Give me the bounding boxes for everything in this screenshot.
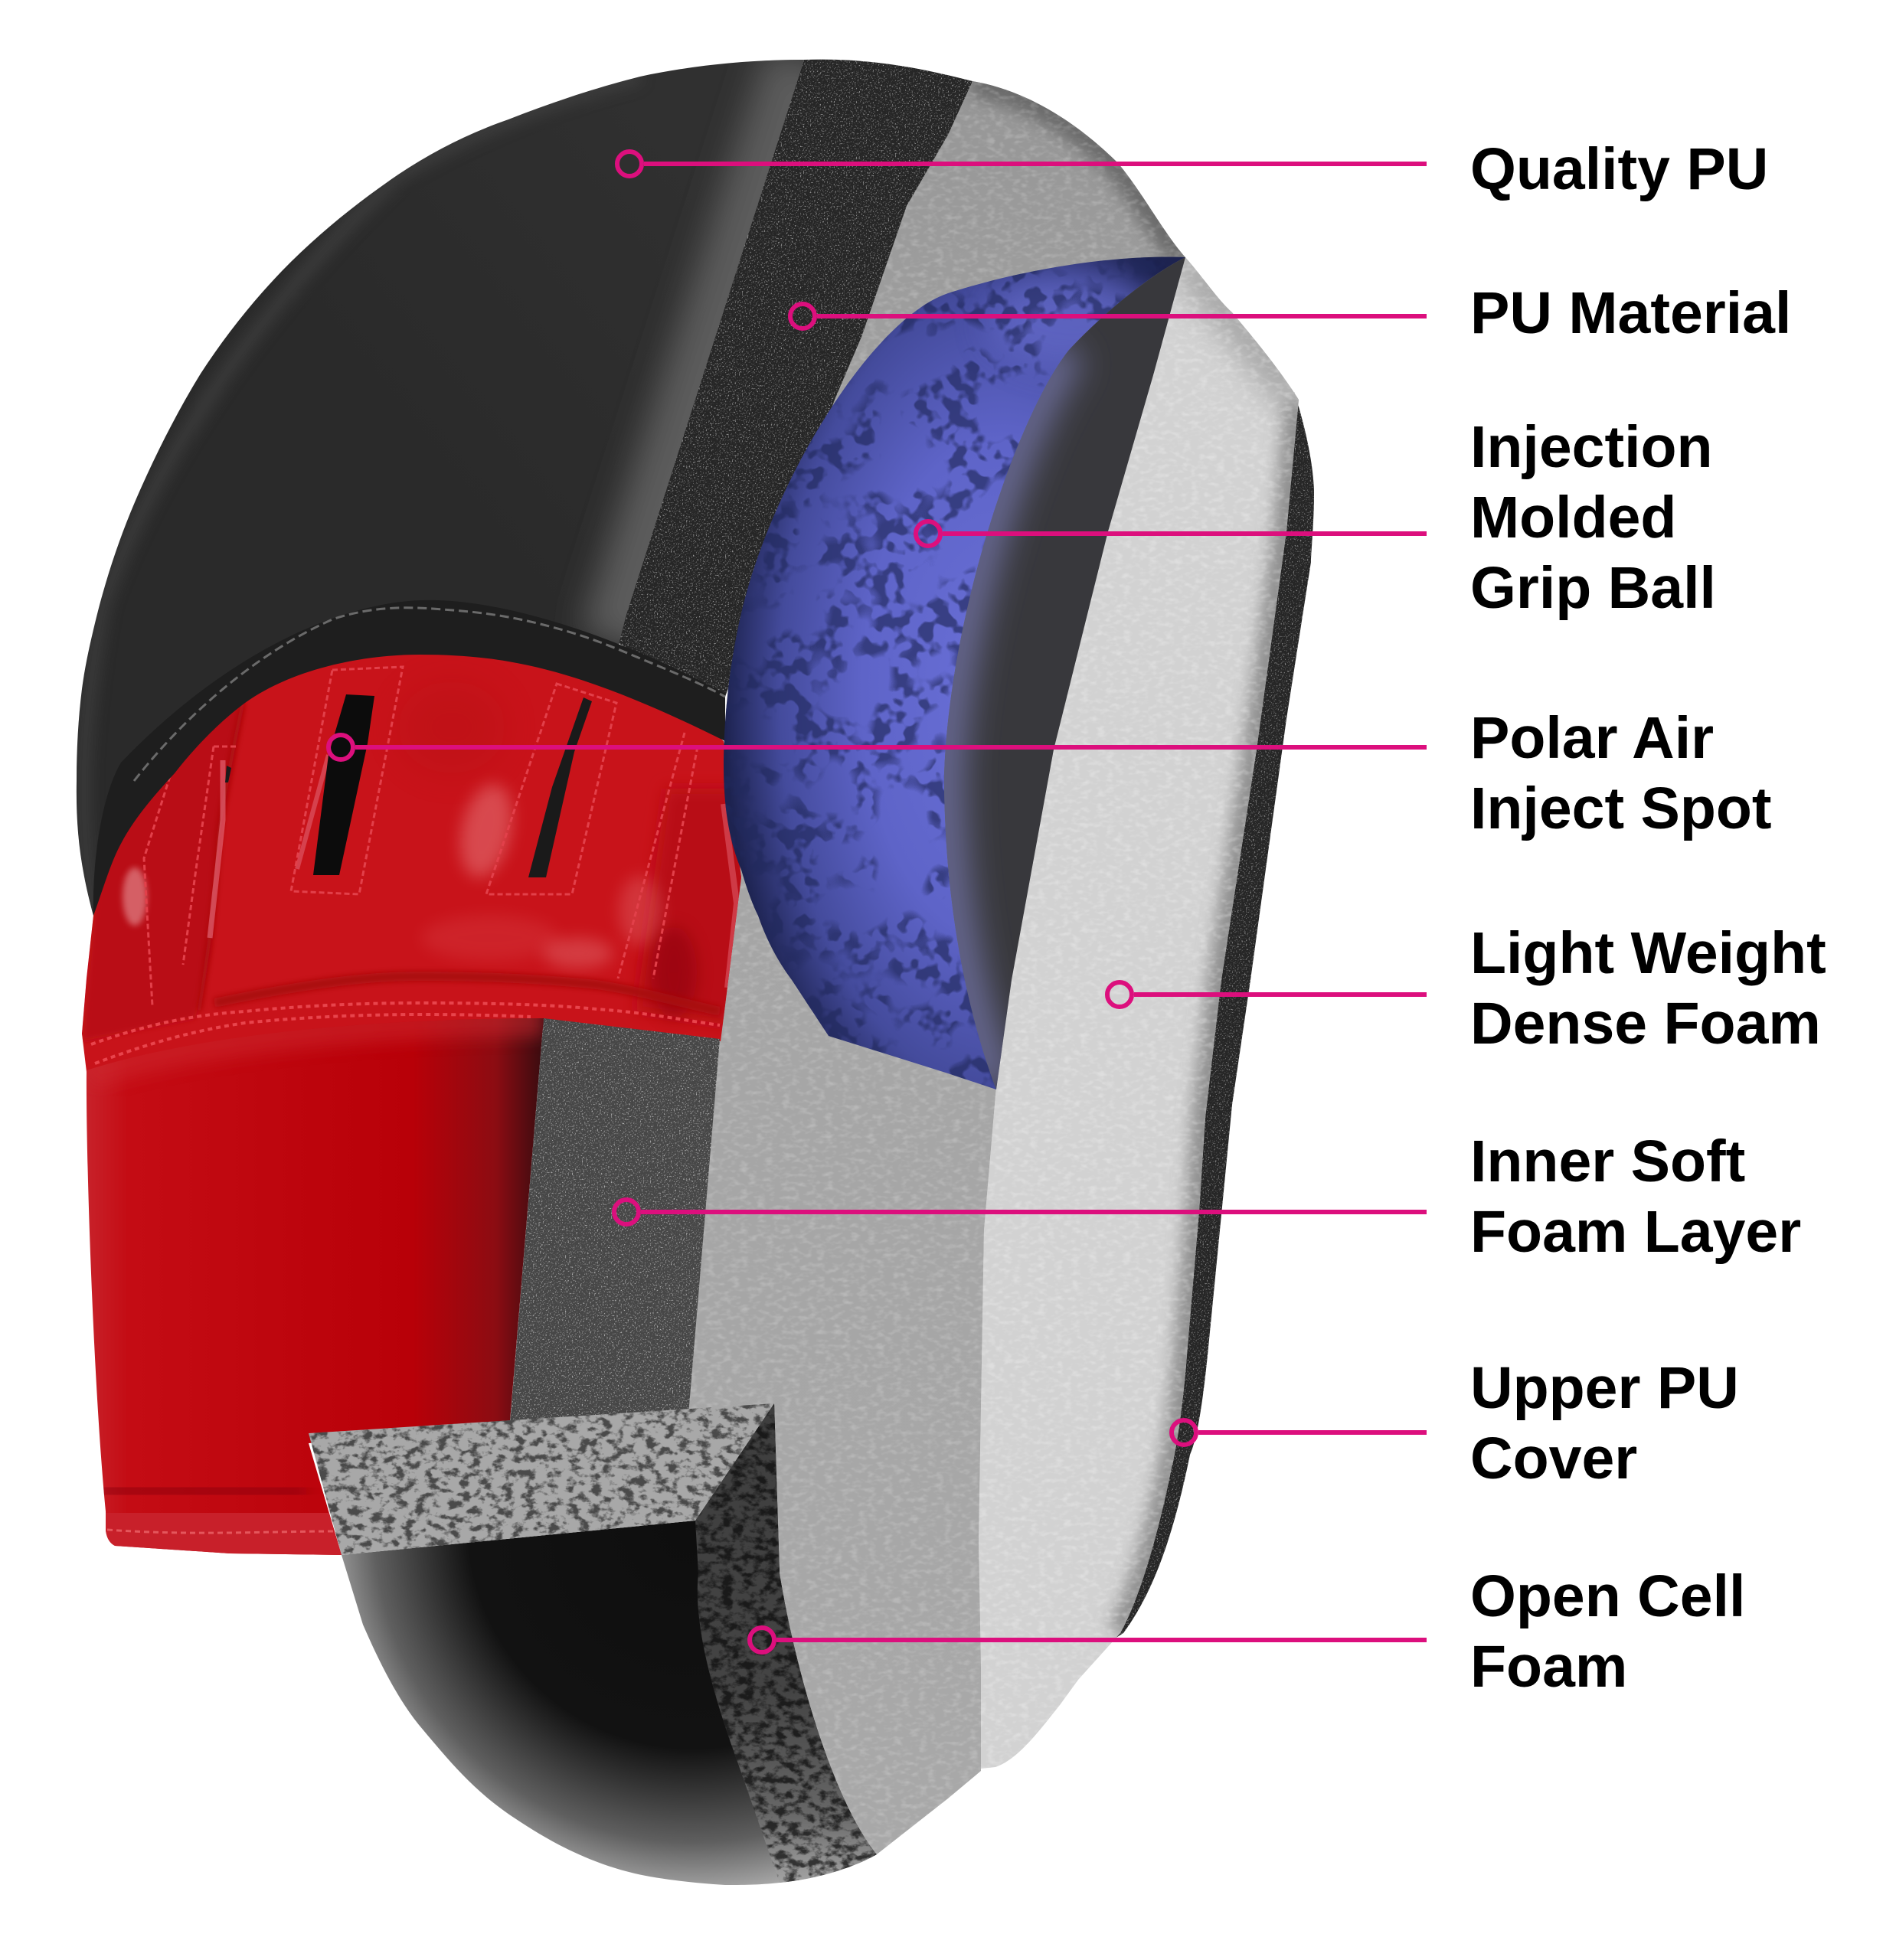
vent slot centre	[313, 694, 374, 875]
callout: Injection Molded Grip Ball: Injection	[1470, 414, 1713, 480]
layer: light weight dense foam	[979, 257, 1299, 1769]
callout: Light Weight Dense Foam: Light Weight	[1470, 920, 1826, 986]
callout: Upper PU Cover: Cover	[1470, 1426, 1637, 1491]
stitches: cuff seam	[91, 1003, 720, 1044]
callout: Upper PU Cover: Upper PU	[1470, 1355, 1739, 1421]
callout: Light Weight Dense Foam	[1107, 920, 1826, 1057]
layer: mid grey foam	[680, 81, 1185, 1854]
callout: PU Material	[790, 280, 1791, 346]
layer: back PU cover	[1103, 392, 1314, 1646]
callout: Light Weight Dense Foam: Dense Foam	[1470, 991, 1821, 1057]
callout: PU Material: PU Material	[1470, 280, 1791, 346]
callout: Polar Air Inject Spot: Polar Air	[1470, 705, 1714, 771]
layer: injection molded grip ball	[724, 257, 1185, 1089]
layer: PU material foam strip	[618, 60, 973, 697]
shaded left gathered panel	[82, 689, 245, 1041]
layer: open cell foam flap	[309, 1403, 774, 1555]
callout: Polar Air Inject Spot: Inject Spot	[1470, 776, 1772, 841]
callout: Upper PU Cover	[1172, 1355, 1739, 1491]
callout: Open Cell Foam: Open Cell	[1470, 1563, 1745, 1629]
layer: red hand section	[82, 628, 758, 1072]
callout: Quality PU	[617, 136, 1768, 202]
vent slot left small	[225, 766, 231, 782]
pink welt left	[210, 760, 223, 938]
callout: Open Cell Foam	[750, 1563, 1745, 1700]
callout: Injection Molded Grip Ball	[916, 414, 1716, 621]
panel edge	[199, 703, 243, 1011]
panel: focus mitt cross-section	[77, 60, 1314, 1885]
layer: red cuff	[77, 1003, 720, 1559]
callout: Polar Air Inject Spot	[329, 705, 1772, 841]
callout: Injection Molded Grip Ball: Molded	[1470, 485, 1676, 550]
stitches: vent panels	[144, 667, 698, 1006]
layer: inner soft foam	[509, 1018, 720, 1432]
vent slot right	[528, 697, 592, 877]
callout: Quality PU: Quality PU	[1470, 136, 1768, 202]
callout: Inner Soft Foam Layer: Foam Layer	[1470, 1199, 1801, 1265]
layer: open cell foam bowl	[342, 1403, 877, 1885]
callout: Injection Molded Grip Ball: Grip Ball	[1470, 555, 1716, 621]
layer: quality PU black shell	[77, 60, 804, 916]
callout: Inner Soft Foam Layer	[614, 1129, 1801, 1265]
layer: ball cavity	[944, 257, 1185, 1089]
callout: Inner Soft Foam Layer: Inner Soft	[1470, 1129, 1745, 1194]
crease under centre panel	[214, 976, 720, 1011]
callout: Open Cell Foam: Foam	[1470, 1634, 1627, 1700]
